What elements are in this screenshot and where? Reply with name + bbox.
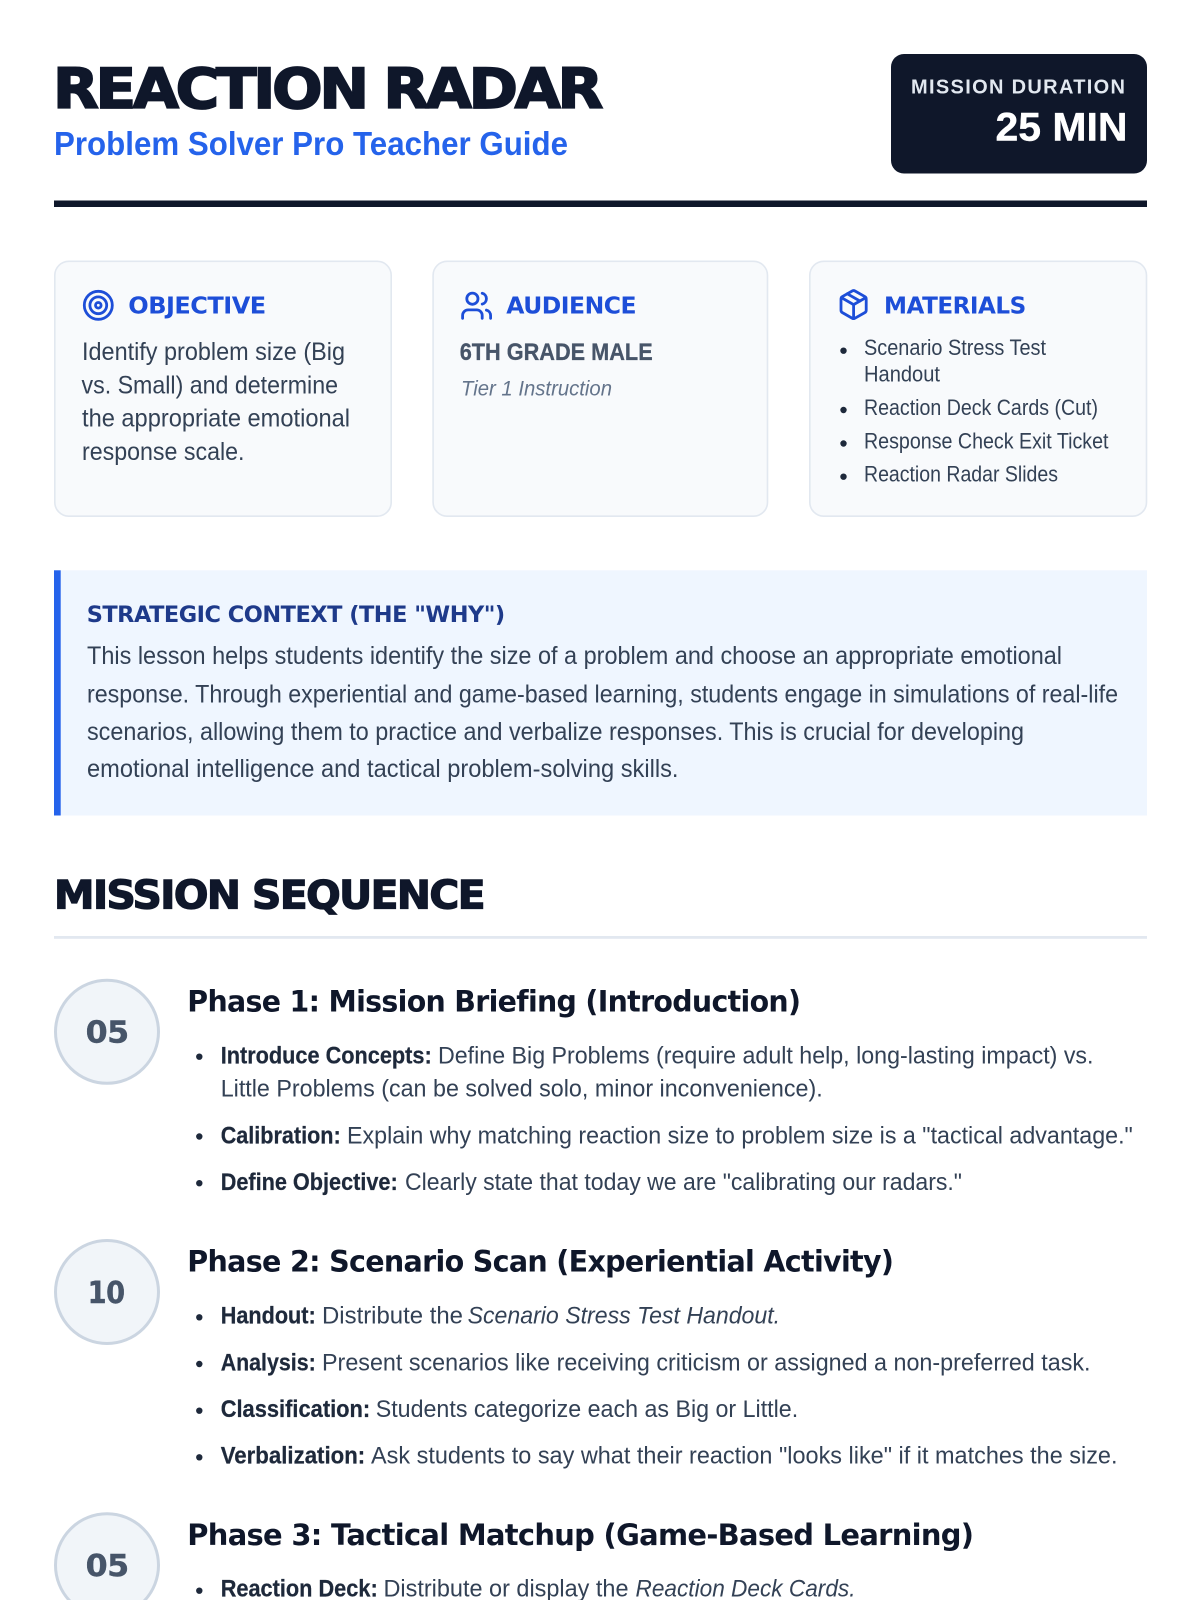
panel: strategic context — [54, 570, 1147, 816]
phase 2 heading: Phase 2: Scenario Scan (Experiential Activity) — [187, 1245, 893, 1279]
strategic context text — [87, 642, 1118, 783]
phase 2 list — [196, 1303, 1118, 1470]
phase 1 — [56, 980, 1133, 1196]
objective text: vs. Small) and determine — [82, 371, 338, 399]
strategic context text: This lesson helps students identify the size of a problem and choose an appropriate emotional — [87, 642, 1062, 670]
phase 1 list: Calibration: — [221, 1122, 341, 1149]
phase 2 list: Handout: — [221, 1303, 316, 1330]
phase 1 list: Clearly state that today we are "calibrating our radars." — [405, 1169, 962, 1196]
time badge: 10: 10 — [88, 1276, 125, 1311]
phase 3 list — [196, 1576, 856, 1600]
mission sequence heading: MISSION SEQUENCE — [54, 872, 484, 918]
audience tier: Tier 1 Instruction — [461, 378, 612, 400]
audience heading: AUDIENCE — [506, 293, 636, 319]
phase 2 list: Scenario Stress Test Handout. — [468, 1303, 780, 1330]
phase 3 — [56, 1514, 973, 1600]
materials list: Handout — [864, 362, 940, 387]
phase 2 list: Analysis: — [221, 1349, 316, 1376]
icon: package — [841, 291, 866, 319]
phase 2 list: Present scenarios like receiving criticism or assigned a non-preferred task. — [322, 1349, 1090, 1376]
panel: objective — [55, 261, 391, 516]
time badge: 05 — [56, 980, 158, 1083]
objective heading: OBJECTIVE — [128, 293, 266, 319]
materials heading: MATERIALS — [884, 293, 1026, 319]
title: REACTION RADAR — [53, 57, 602, 122]
phase 1 list: Define Objective: — [221, 1169, 398, 1196]
phase 1 list: Little Problems (can be solved solo, minor inconvenience). — [221, 1076, 823, 1103]
objective text — [82, 338, 350, 466]
strategic context text: scenarios, allowing them to practice and verbalize responses. This is crucial for developing — [87, 718, 1024, 746]
strategic context text: response. Through experiential and game-based learning, students engage in simulations of real-life — [87, 680, 1118, 708]
header — [53, 54, 1147, 174]
mission duration badge — [891, 54, 1147, 174]
audience value: 6TH GRADE MALE — [460, 339, 653, 366]
mission duration badge: 25 MIN — [996, 106, 1128, 150]
subtitle: Problem Solver Pro Teacher Guide — [54, 125, 568, 162]
phase 2 list: Verbalization: — [221, 1443, 365, 1470]
phase 1 list — [196, 1042, 1133, 1196]
panel: materials — [810, 261, 1146, 516]
mission duration badge: MISSION DURATION — [911, 76, 1125, 98]
time badge: 05: 05 — [86, 1549, 129, 1584]
icon: users — [463, 293, 491, 318]
phase 2 list: Classification: — [221, 1396, 370, 1423]
icon: target — [84, 291, 112, 319]
materials list: Scenario Stress Test — [864, 335, 1046, 360]
phase 1 list: Introduce Concepts: — [221, 1042, 432, 1069]
time badge: 10 — [56, 1240, 158, 1344]
phase 2 list: Students categorize each as Big or Little. — [376, 1396, 798, 1423]
materials list: Response Check Exit Ticket — [864, 428, 1108, 453]
phase 2 list: Ask students to say what their reaction "looks like" if it matches the size. — [371, 1443, 1118, 1470]
objective text: Identify problem size (Big — [82, 338, 345, 366]
panel: audience — [433, 261, 768, 516]
materials list: Reaction Deck Cards (Cut) — [864, 395, 1098, 420]
phase 3 heading: Phase 3: Tactical Matchup (Game-Based Learning) — [187, 1518, 973, 1552]
objective text: response scale. — [82, 438, 244, 466]
materials list: Reaction Radar Slides — [864, 462, 1058, 487]
phase 1 list: Define Big Problems (require adult help, long-lasting impact) vs. — [438, 1042, 1094, 1069]
time badge: 05: 05 — [86, 1016, 129, 1051]
objective text: the appropriate emotional — [82, 405, 350, 433]
strategic context text: emotional intelligence and tactical problem-solving skills. — [87, 755, 678, 783]
phase 1 heading: Phase 1: Mission Briefing (Introduction) — [187, 985, 800, 1019]
time badge: 05 — [56, 1514, 158, 1600]
phase 1 list: Explain why matching reaction size to problem size is a "tactical advantage." — [347, 1122, 1133, 1149]
materials list — [840, 335, 1108, 487]
phase 2 list: Distribute the — [322, 1303, 463, 1330]
phase 2 — [56, 1240, 1118, 1470]
strategic context heading: STRATEGIC CONTEXT (THE "WHY") — [87, 602, 505, 628]
